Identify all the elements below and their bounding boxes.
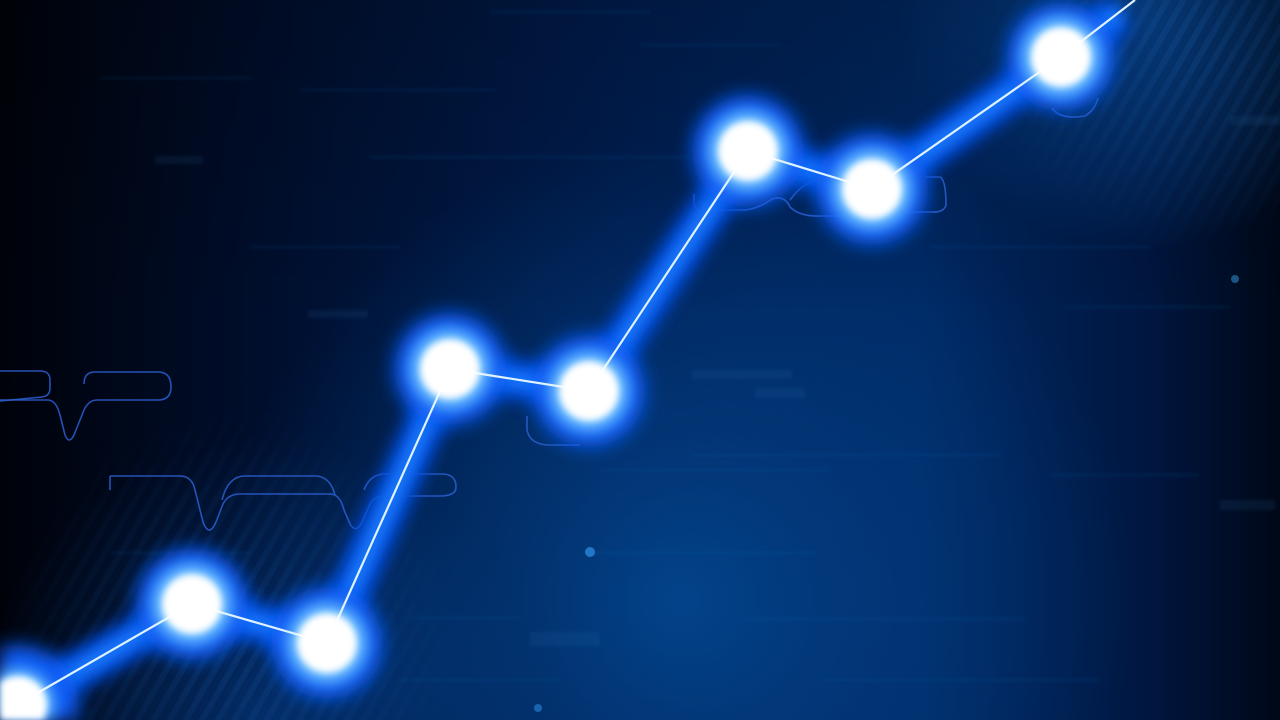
thin outlined waveform lines: [0, 98, 1098, 530]
glowing line: outer halo: [40, 12, 1120, 692]
faint background dots and blurred labels: [155, 116, 1280, 712]
